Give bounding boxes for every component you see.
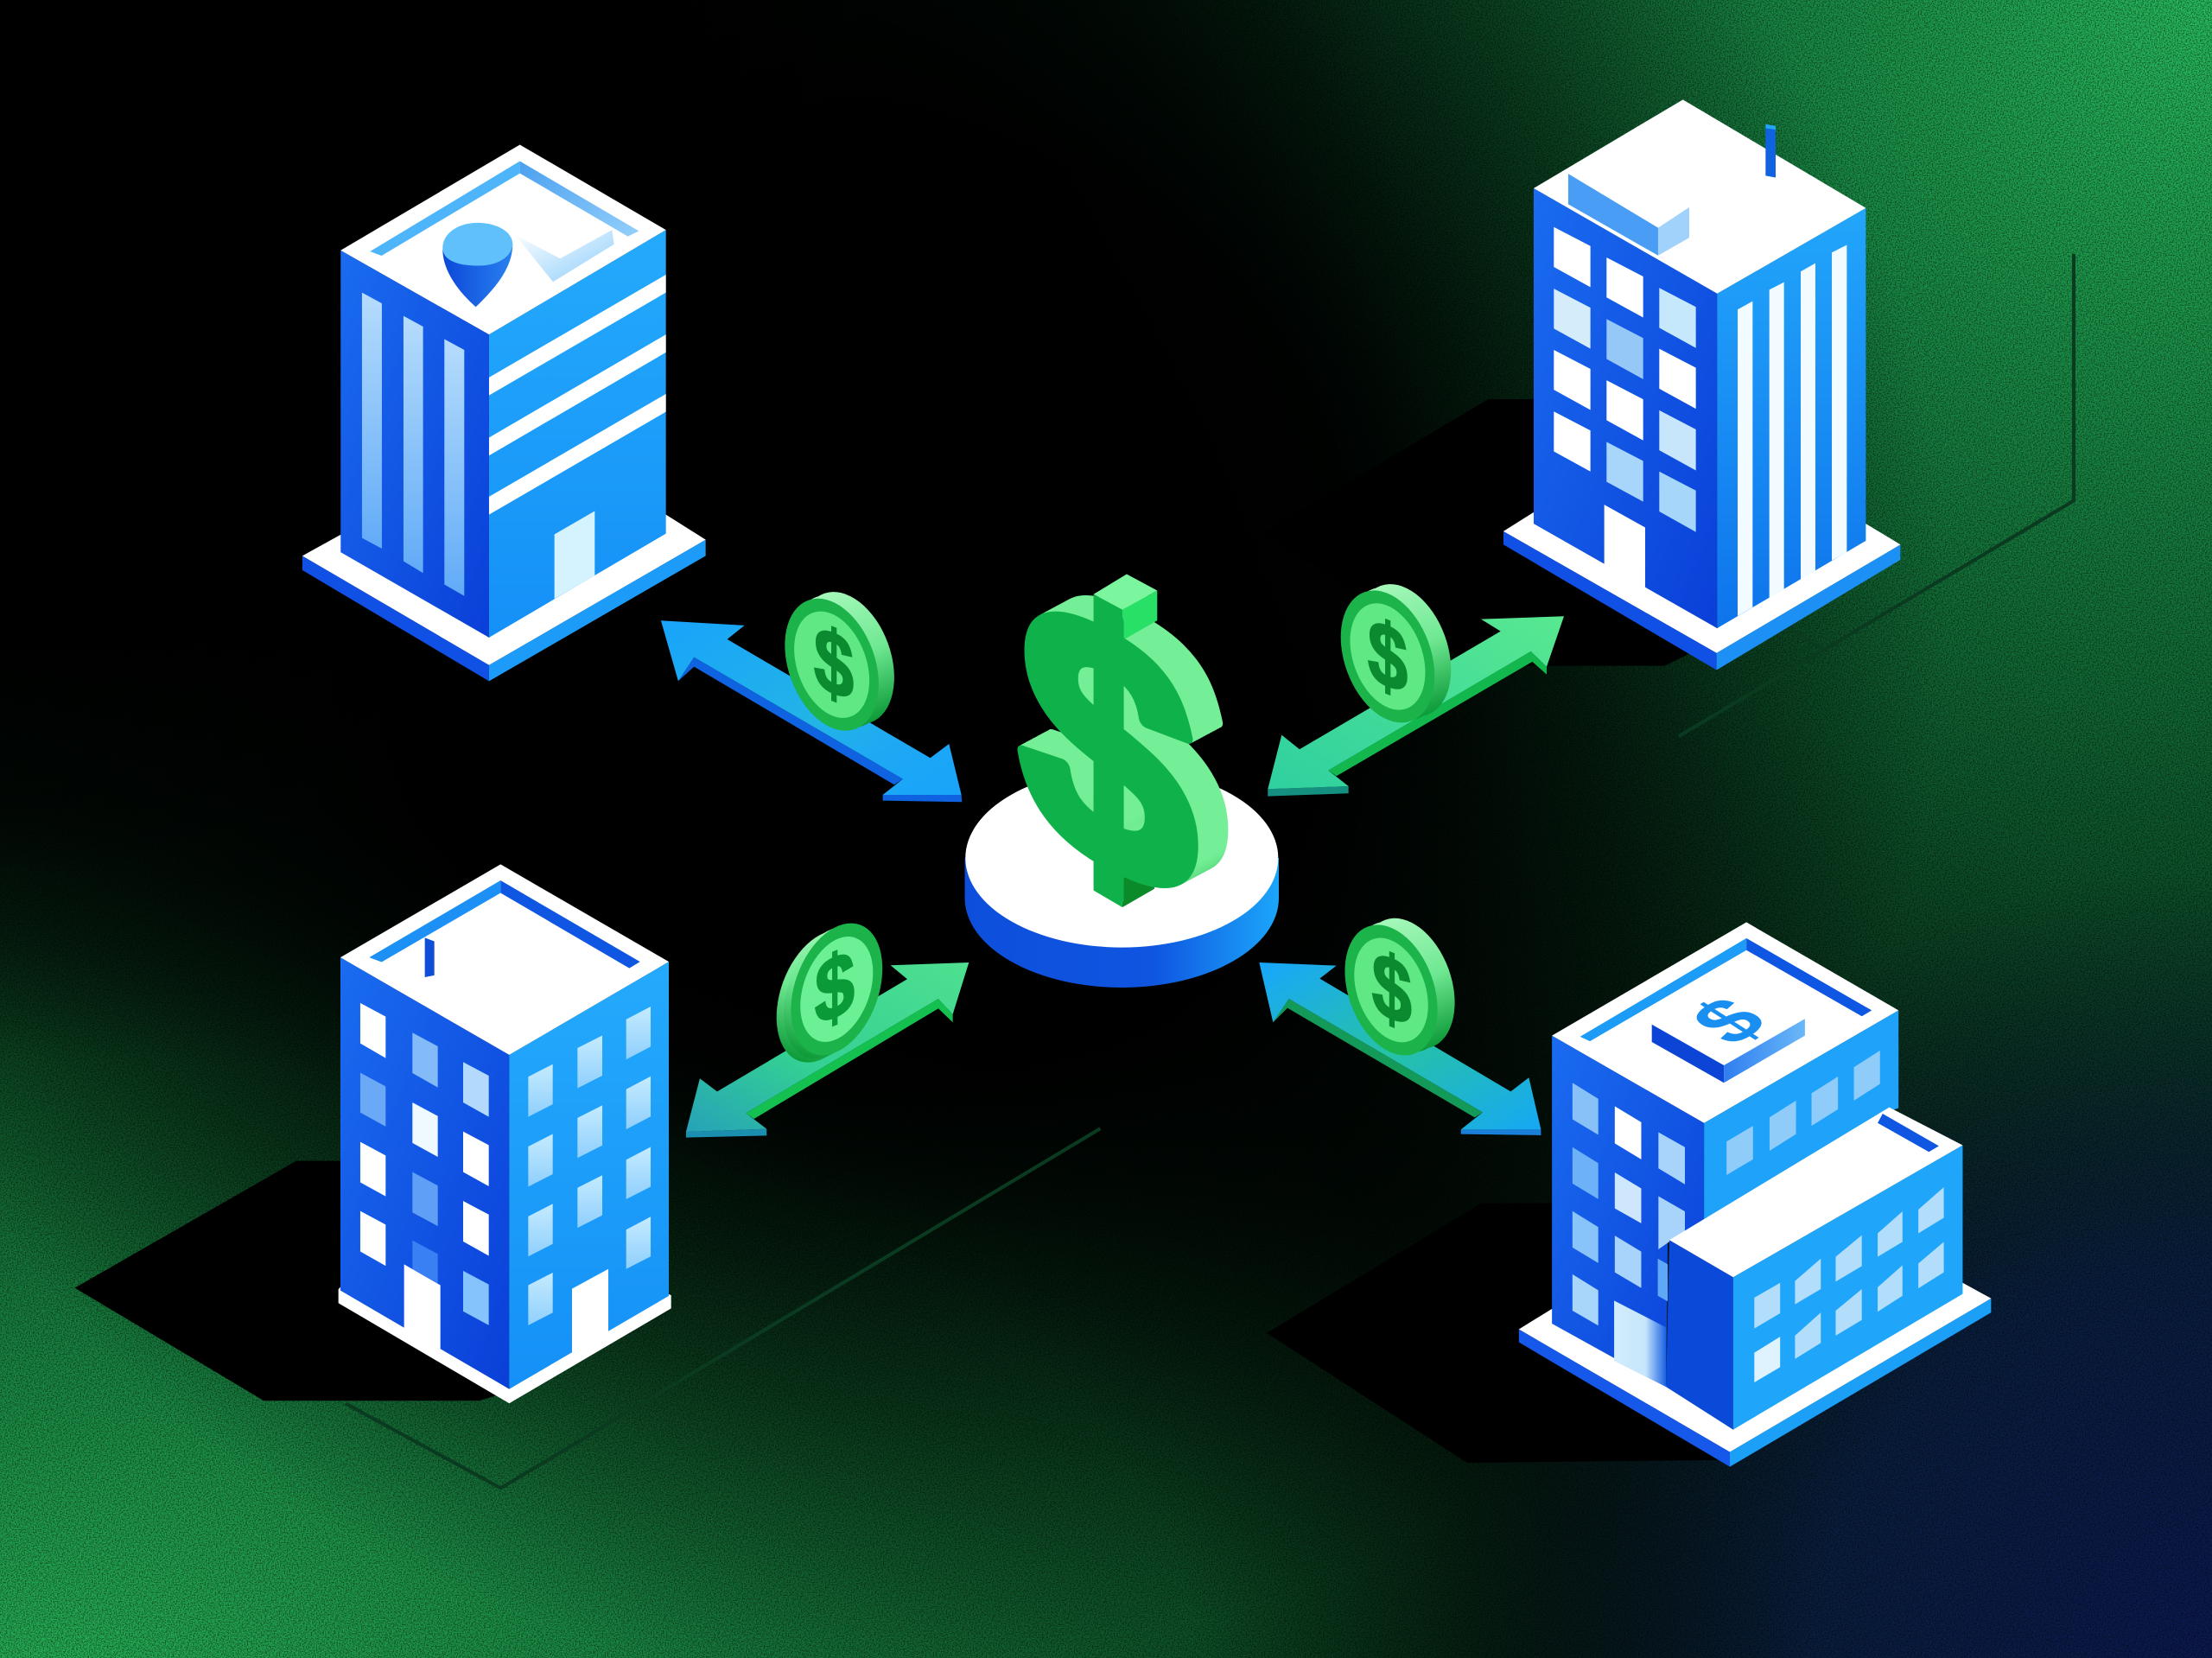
roof rail xyxy=(369,880,640,969)
left wall xyxy=(340,251,489,638)
antenna xyxy=(425,937,435,977)
dollar sign extrusion: $ xyxy=(1032,505,1208,979)
platform xyxy=(302,515,706,681)
arrow: blue two-way xyxy=(661,620,962,802)
arrow: green two-way xyxy=(686,962,969,1138)
upper roof xyxy=(1552,922,1898,1123)
dollar stem cube top and bottom xyxy=(1094,575,1157,907)
floor outline lines xyxy=(346,254,2074,1488)
roof xyxy=(340,864,669,1055)
dollar sign extrusion: $ xyxy=(1027,508,1203,981)
coin xyxy=(1324,571,1468,736)
cast shadows of buildings xyxy=(75,399,1728,1463)
building: top left xyxy=(302,144,706,681)
dollar stem front xyxy=(1094,594,1122,907)
roof sign: $ xyxy=(1672,984,1785,1058)
coin: $ xyxy=(1368,600,1408,715)
coin: $ xyxy=(814,607,854,721)
exchange: top left arrow and coin xyxy=(661,579,962,802)
upper right wall xyxy=(1704,1010,1898,1220)
lower right wall xyxy=(1733,1146,1962,1430)
dollar sign extrusion: $ xyxy=(1040,500,1217,974)
windows right wall xyxy=(528,1007,651,1325)
door right xyxy=(572,1269,608,1358)
roof skylight xyxy=(516,230,614,282)
lower roof rail xyxy=(1878,1114,1939,1152)
arrow: green two-way xyxy=(1268,616,1564,797)
arrow: blue-teal two-way xyxy=(1259,962,1541,1135)
right wall xyxy=(1717,208,1866,628)
roof sign xyxy=(1652,984,1805,1083)
platform xyxy=(339,1287,671,1403)
building: top right xyxy=(1503,99,1900,670)
windows left wall xyxy=(360,1003,489,1325)
door xyxy=(1605,505,1645,592)
roof box xyxy=(1568,174,1689,256)
dollar sign extrusion: $ xyxy=(1050,495,1226,969)
windows left wall xyxy=(1554,227,1696,532)
door xyxy=(1614,1300,1666,1387)
disc top xyxy=(965,768,1278,948)
coin xyxy=(760,911,899,1075)
right wall xyxy=(489,230,666,638)
lower roof xyxy=(1669,1108,1962,1277)
right wall xyxy=(509,962,669,1389)
central hub: platform with dollar sign xyxy=(965,495,1279,988)
dollar sign extrusion: $ xyxy=(1029,506,1205,980)
coin xyxy=(767,579,912,744)
antenna xyxy=(1765,124,1776,178)
dollar sign extrusion: $ xyxy=(1039,502,1215,975)
windows upper right wall xyxy=(1726,1051,1880,1175)
left wall xyxy=(340,957,509,1389)
right wall stripes xyxy=(1738,245,1847,616)
dollar sign extrusion: $ xyxy=(1022,511,1198,984)
upper left wall xyxy=(1552,1036,1704,1387)
right wall bands xyxy=(489,275,666,515)
roof xyxy=(1534,99,1866,294)
dollar sign extrusion: $ xyxy=(1036,503,1212,976)
building: bottom right xyxy=(1519,922,1991,1467)
exchange: bottom right arrow and coin xyxy=(1259,905,1541,1135)
roof dome xyxy=(442,223,512,307)
dollar sign extrusion: $ xyxy=(1025,509,1201,982)
door xyxy=(555,511,594,599)
roof xyxy=(340,144,666,334)
roof rail xyxy=(370,162,639,256)
dollar sign front: $ xyxy=(1020,511,1196,985)
exchange: top right arrow and coin xyxy=(1268,571,1564,797)
windows left wall xyxy=(1573,1083,1685,1325)
roof rails xyxy=(1580,938,1872,1041)
door left xyxy=(404,1264,441,1355)
coin xyxy=(1328,905,1471,1068)
dollar sign extrusion: $ xyxy=(1033,504,1210,978)
dollar sign extrusion: $ xyxy=(1047,497,1224,970)
building: bottom left xyxy=(339,864,671,1403)
disc side xyxy=(965,858,1279,988)
left wall stripes xyxy=(362,293,464,596)
coin: $ xyxy=(1372,932,1412,1047)
platform xyxy=(1503,512,1900,670)
dollar sign extrusion: $ xyxy=(1043,499,1219,973)
platform xyxy=(1519,1283,1991,1467)
coin: $ xyxy=(815,931,855,1045)
exchange: bottom left arrow and coin xyxy=(686,911,969,1138)
lower left wall xyxy=(1666,1240,1733,1430)
dollar sign extrusion: $ xyxy=(1046,498,1222,971)
windows lower right wall xyxy=(1754,1187,1944,1382)
left wall xyxy=(1534,188,1717,628)
